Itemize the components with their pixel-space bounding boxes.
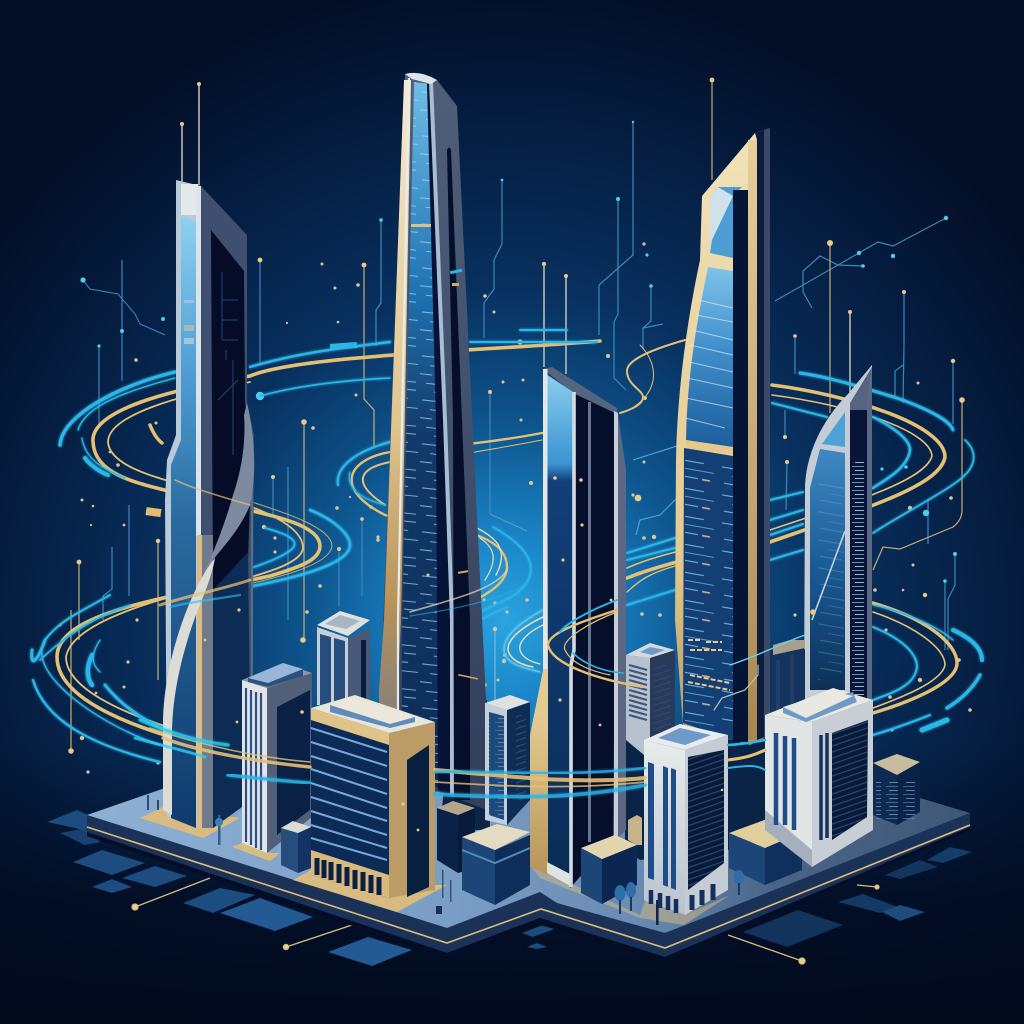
spiral on tower 3 <box>548 600 643 687</box>
tower 5 <box>804 365 872 700</box>
plazas <box>140 807 730 925</box>
tower 1 <box>165 180 254 828</box>
floor tiles <box>47 810 972 966</box>
back building centre <box>485 695 530 825</box>
tower 4 <box>675 128 770 745</box>
big gold building <box>311 695 435 898</box>
small dark block far right <box>873 754 920 825</box>
faded back building <box>770 640 805 735</box>
dark tower bases behind the low blocks <box>440 700 800 860</box>
small front block <box>281 821 311 873</box>
cyan spiral paths <box>32 330 982 762</box>
cream-roof block front <box>581 815 642 904</box>
floating rectangles <box>146 342 357 517</box>
tower 2 loop crossing <box>410 570 525 616</box>
middle band <box>435 768 645 797</box>
swirl rings behind towers <box>32 330 982 767</box>
white block right <box>765 688 873 867</box>
tower 3 <box>530 367 626 888</box>
platform <box>87 788 970 960</box>
back building left <box>317 611 370 705</box>
glowing foreground nodes <box>204 476 816 831</box>
cyan strand on tower 4 <box>730 635 805 665</box>
white tower right <box>644 724 728 915</box>
dark block with tan roof <box>437 801 475 873</box>
platform top surface <box>87 788 970 933</box>
tower 2 <box>379 73 487 810</box>
cyan nodes <box>80 121 957 583</box>
floor connector lines <box>132 878 879 964</box>
foreground swirl band crossing the towers <box>135 480 805 797</box>
striped building <box>242 663 312 853</box>
scattered dots <box>58 242 972 774</box>
cream-roof block centre <box>462 824 530 905</box>
gold spiral paths <box>57 340 957 767</box>
platform side walls <box>87 813 970 960</box>
right band <box>728 740 765 770</box>
large nodes <box>68 78 965 754</box>
trees and lamps <box>147 795 744 925</box>
upper strands over tower 1 <box>160 480 250 607</box>
left band <box>135 720 310 783</box>
striped back building right <box>626 643 675 760</box>
circuit lines and nodes <box>71 80 962 750</box>
tan-roof block right front <box>729 819 802 885</box>
tower 1 ribbon <box>163 403 254 815</box>
